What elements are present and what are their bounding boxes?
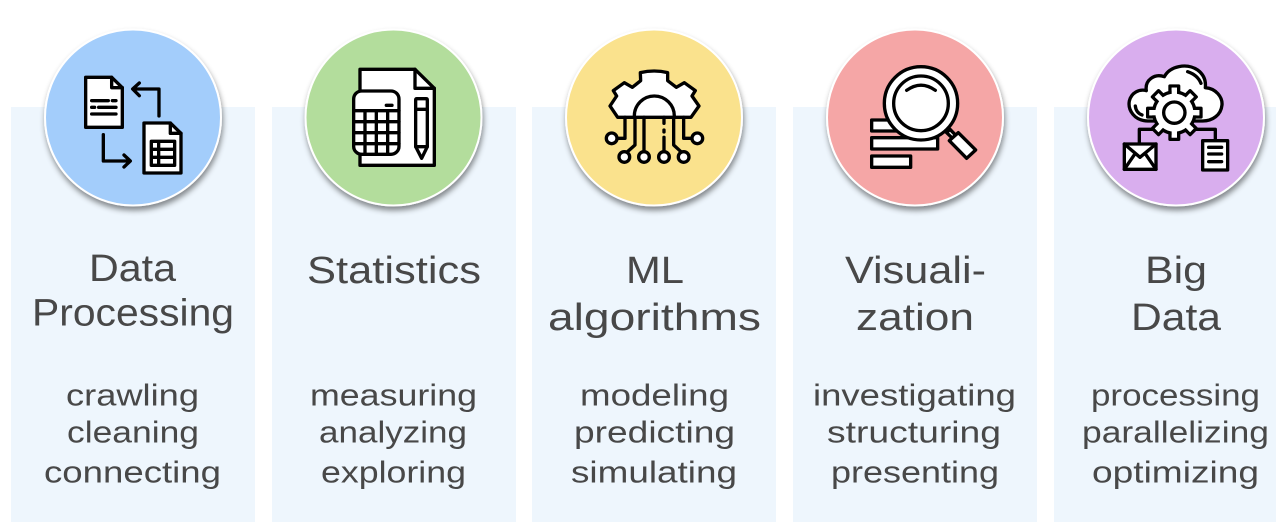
- heading: ML: [626, 250, 684, 292]
- heading: Visuali-: [845, 250, 986, 292]
- icon circle: purple: [1088, 30, 1264, 206]
- text block: crawling: [66, 378, 199, 412]
- icon circle: red: [827, 30, 1003, 206]
- heading: [32, 248, 234, 334]
- text block: analyzing: [319, 414, 467, 450]
- text block: simulating: [571, 454, 737, 490]
- text block: investigating: [813, 378, 1016, 412]
- text block: parallelizing: [1082, 414, 1269, 450]
- text block: cleaning: [67, 414, 199, 450]
- text block: measuring: [310, 378, 477, 412]
- text block: optimizing: [1092, 454, 1259, 490]
- panel: statistics: [272, 30, 516, 522]
- icon circle: green: [306, 30, 482, 206]
- panel: big data: [1054, 30, 1276, 522]
- icon circle: yellow: [566, 30, 742, 206]
- text block: modeling: [580, 378, 729, 412]
- heading: [1131, 250, 1222, 339]
- text block: predicting: [574, 414, 735, 450]
- text block: [44, 378, 221, 490]
- heading: Big: [1145, 250, 1207, 292]
- icon: calculator and paper: [354, 69, 434, 165]
- text block: exploring: [321, 454, 466, 490]
- heading: [548, 250, 761, 339]
- text block: [571, 378, 737, 490]
- text block: [1082, 378, 1269, 490]
- heading: [845, 250, 986, 339]
- text block: presenting: [831, 454, 999, 490]
- icon: documents exchange: [86, 77, 181, 173]
- text block: structuring: [827, 414, 1001, 450]
- heading: Data: [89, 248, 177, 290]
- text block: connecting: [44, 454, 221, 490]
- panel: data processing: [11, 30, 255, 522]
- panel: visualization: [793, 30, 1037, 522]
- text block: [310, 378, 477, 490]
- heading: Statistics: [307, 250, 481, 292]
- icon: cloud with gear: [1124, 66, 1228, 170]
- icon circle: blue: [45, 30, 221, 206]
- heading: algorithms: [548, 297, 761, 339]
- heading: zation: [856, 297, 974, 339]
- panel: ML algorithms: [532, 30, 776, 522]
- icon: magnifier over bars: [872, 67, 976, 167]
- text block: [813, 378, 1016, 490]
- heading: Data: [1131, 297, 1222, 339]
- text block: processing: [1091, 378, 1260, 412]
- icon: gear with circuits: [606, 71, 703, 162]
- heading: Processing: [32, 292, 234, 334]
